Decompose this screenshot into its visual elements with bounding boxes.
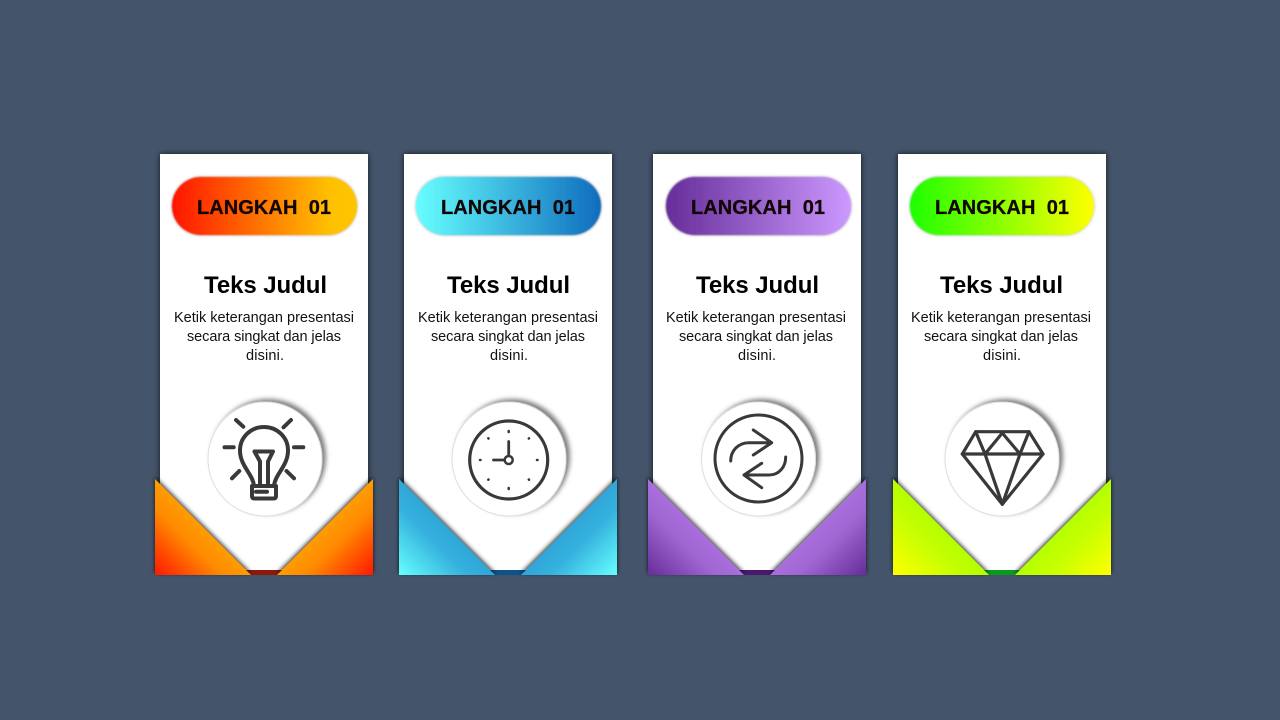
step pill: LANGKAH 01: [935, 197, 1069, 219]
ribbon: lime folded base: [893, 479, 1111, 575]
panel: step card 3: [648, 154, 866, 575]
description: Ketik keterangan presentasi: [911, 310, 1091, 326]
description: [418, 310, 598, 364]
step pill: [910, 177, 1094, 235]
step pill: [172, 177, 357, 235]
heading: Teks Judul: [204, 272, 327, 299]
icon: diamond: [945, 402, 1059, 516]
heading: Teks Judul: [940, 272, 1063, 299]
step pill: LANGKAH 01: [691, 197, 825, 219]
step pill: [666, 177, 851, 235]
description: disini.: [490, 348, 528, 364]
description: disini.: [983, 348, 1021, 364]
description: Ketik keterangan presentasi: [666, 310, 846, 326]
description: disini.: [738, 348, 776, 364]
ribbon: orange-red folded base: [155, 479, 373, 575]
icon: cycle arrows: [702, 402, 816, 516]
description: Ketik keterangan presentasi: [418, 310, 598, 326]
description: Ketik keterangan presentasi: [174, 310, 354, 326]
description: secara singkat dan jelas: [431, 329, 585, 345]
description: [174, 310, 354, 364]
icon: clock: [452, 402, 566, 516]
ribbon: purple folded base: [648, 479, 866, 575]
panel: step card 2: [399, 154, 617, 575]
white card body: [653, 154, 861, 570]
panel: step card 1: [155, 154, 373, 575]
description: disini.: [246, 348, 284, 364]
description: [666, 310, 846, 364]
white card body: [160, 154, 368, 570]
white card body: [898, 154, 1106, 570]
step pill: [416, 177, 601, 235]
description: secara singkat dan jelas: [679, 329, 833, 345]
step pill: LANGKAH 01: [441, 197, 575, 219]
icon: light bulb: [208, 402, 322, 516]
ribbon: blue folded base: [399, 479, 617, 575]
step pill: LANGKAH 01: [197, 197, 331, 219]
description: secara singkat dan jelas: [924, 329, 1078, 345]
heading: Teks Judul: [696, 272, 819, 299]
description: [911, 310, 1091, 364]
panel: step card 4: [893, 154, 1111, 575]
description: secara singkat dan jelas: [187, 329, 341, 345]
heading: Teks Judul: [447, 272, 570, 299]
white card body: [404, 154, 612, 570]
